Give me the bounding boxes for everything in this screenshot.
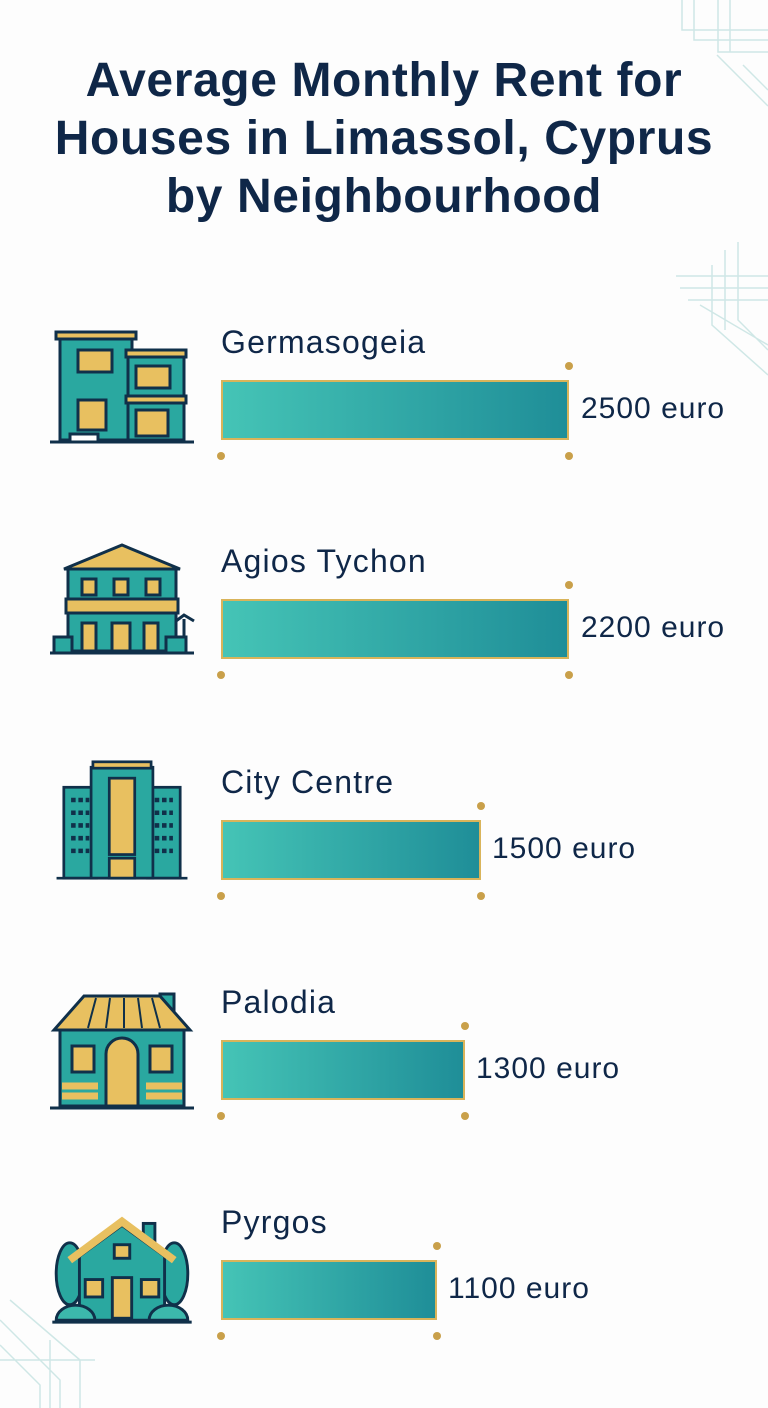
label: City Centre bbox=[221, 764, 394, 800]
bar: 1100 bbox=[221, 1260, 437, 1320]
row: Germasogeia bbox=[50, 324, 725, 460]
title: Average Monthly Rent for bbox=[86, 54, 682, 107]
value: 2500 euro bbox=[581, 392, 725, 425]
icon: modern villa bbox=[50, 330, 194, 444]
title: Houses in Limassol, Cyprus bbox=[55, 112, 713, 165]
icon: classic villa bbox=[50, 543, 195, 654]
title: by Neighbourhood bbox=[166, 170, 602, 223]
label: Palodia bbox=[221, 984, 336, 1020]
label: Pyrgos bbox=[221, 1204, 328, 1240]
bar: 2200 bbox=[221, 599, 569, 659]
bar: 2500 bbox=[221, 380, 569, 440]
value: 1300 euro bbox=[476, 1052, 620, 1085]
row: Palodia bbox=[50, 984, 620, 1120]
label: Germasogeia bbox=[221, 324, 426, 360]
row: Agios Tychon bbox=[50, 543, 725, 679]
row: City Centre bbox=[56, 760, 636, 900]
row: Pyrgos bbox=[52, 1204, 590, 1340]
value: 1500 euro bbox=[492, 832, 636, 865]
bar: 1300 bbox=[221, 1040, 465, 1100]
bar: 1500 bbox=[221, 820, 481, 880]
label: Agios Tychon bbox=[221, 543, 427, 579]
icon: apartment tower bbox=[56, 760, 188, 880]
icon: stone cottage bbox=[50, 992, 194, 1110]
value: 2200 euro bbox=[581, 611, 725, 644]
icon: house with trees bbox=[52, 1216, 192, 1324]
value: 1100 euro bbox=[448, 1272, 590, 1305]
title bbox=[55, 54, 713, 223]
